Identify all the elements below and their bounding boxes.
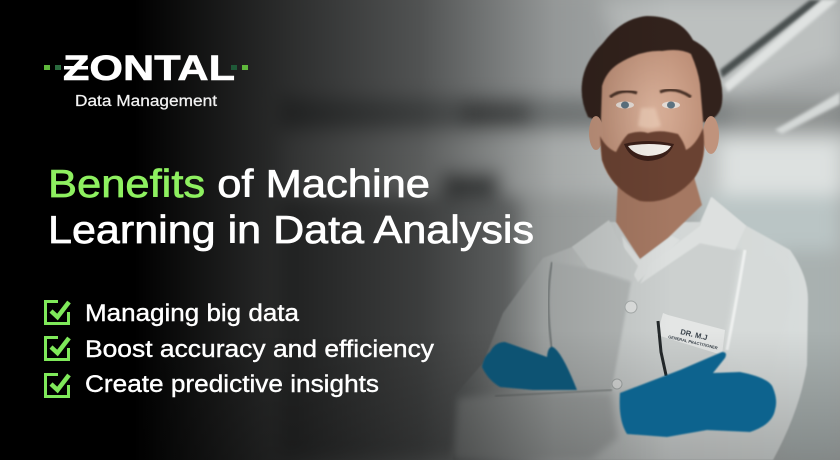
item: managing big data: Managing big data xyxy=(85,300,299,327)
eyes and brows xyxy=(610,90,691,108)
pen xyxy=(658,321,666,376)
name badge: GENERAL PRACTITIONER xyxy=(668,334,718,350)
item: boost accuracy and efficiency: Boost accuracy and efficiency xyxy=(85,336,435,363)
title: Benefits of Machine xyxy=(48,163,430,206)
logo: ZONTAL Data Management xyxy=(44,49,248,110)
title: Learning in Data Analysis xyxy=(48,209,534,252)
left collar xyxy=(572,220,638,279)
name badge: DR. M.J xyxy=(680,327,708,342)
ears xyxy=(589,116,603,150)
logo subtitle: Data Management xyxy=(75,93,218,110)
mouth xyxy=(624,141,674,161)
shirt collar under neck xyxy=(622,236,680,282)
nose xyxy=(638,108,661,128)
lab coat xyxy=(453,197,808,460)
neck xyxy=(616,170,702,259)
doctor photo illustration xyxy=(453,16,808,460)
right collar xyxy=(640,197,746,284)
checklist xyxy=(46,300,435,398)
name badge xyxy=(657,313,725,355)
title xyxy=(48,163,534,252)
right glove xyxy=(620,352,776,437)
item: create predictive insights: Create predictive insights xyxy=(85,371,379,398)
logo wordmark: ZONTAL xyxy=(63,49,235,88)
hair xyxy=(582,16,722,122)
left glove xyxy=(482,342,577,390)
beard xyxy=(600,128,704,202)
face xyxy=(601,50,704,200)
logo squares xyxy=(44,65,248,70)
logo Z strike xyxy=(64,66,88,70)
